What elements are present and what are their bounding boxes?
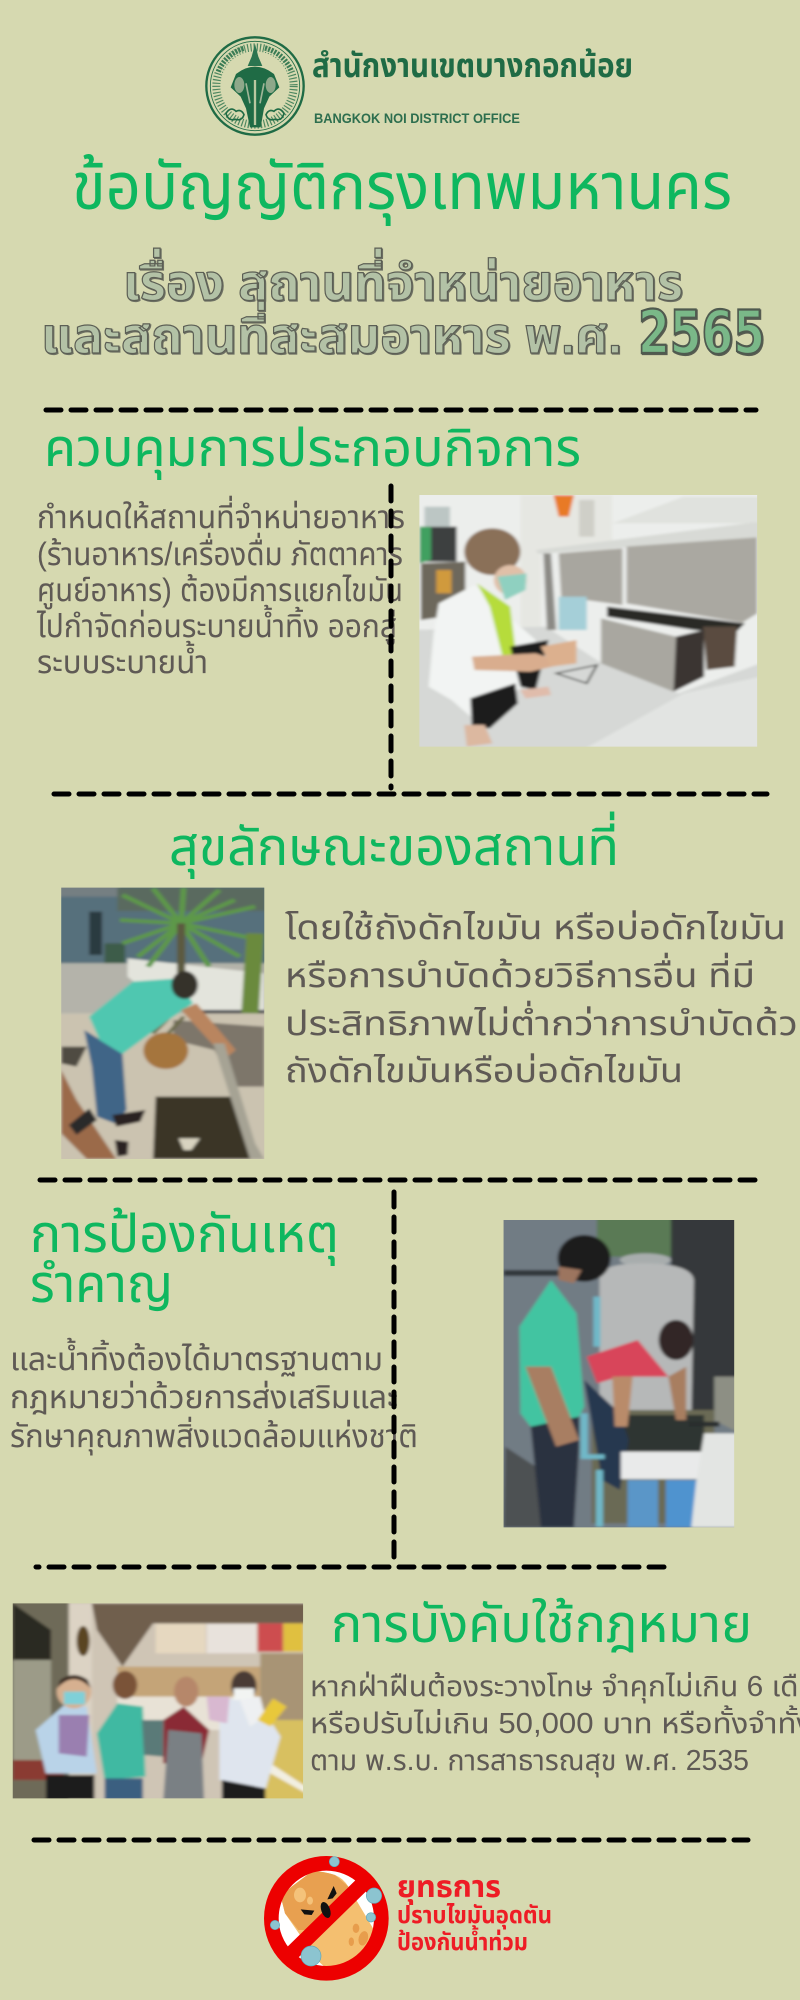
title: ข้อบัญญัติกรุงเทพมหานคร xyxy=(72,150,732,226)
text block: penalties xyxy=(310,1671,800,1777)
heading: law enforcement: การบังคับใช้กฎหมาย xyxy=(331,1595,752,1654)
campaign text: ปราบไขมันอุดตัน xyxy=(397,1902,552,1930)
panel: nuisance prevention xyxy=(10,1192,740,1560)
text block: grease trap requirement: หรือการบำบัดด้วยวิธีการอื่น ที่มี xyxy=(285,952,755,995)
campaign text: ยุทธการ xyxy=(397,1871,501,1905)
panel: premises sanitation xyxy=(51,811,800,1163)
subtitle xyxy=(41,248,765,368)
subtitle line 1: เรื่อง สถานที่จำหน่ายอาหาร xyxy=(123,248,683,311)
office name in Thai: สำนักงานเขตบางกอกน้อย xyxy=(312,47,633,85)
heading: business control: ควบคุมการประกอบกิจการ xyxy=(44,419,581,480)
subtitle line 2: และสถานที่สะสมอาหาร พ.ศ. xyxy=(41,301,622,364)
campaign text: ป้องกันน้ำท่วม xyxy=(397,1925,528,1956)
photo: officers with restaurant staff holding leaflets xyxy=(5,1600,311,1803)
heading: nuisance prevention: รำคาญ xyxy=(30,1255,173,1314)
text block: wastewater standards: รักษาคุณภาพสิ่งแวดล้อมแห่งชาติ xyxy=(10,1416,418,1455)
icon: Bangkok city seal xyxy=(206,37,304,135)
icon: crossed-out grease sponge xyxy=(270,1857,382,1973)
text block: fat separation requirement: (ร้านอาหาร/เครื่องดื่ม ภัตตาคาร xyxy=(37,532,403,572)
text block: penalties: ตาม พ.ร.บ. การสาธารณสุข พ.ศ. 2535 xyxy=(310,1745,749,1777)
text block: grease trap requirement: ประสิทธิภาพไม่ต่ำกว่าการบำบัดด้วย xyxy=(285,1000,800,1043)
text block: wastewater standards: และน้ำทิ้งต้องได้มาตรฐานตาม xyxy=(10,1337,383,1377)
text block: fat separation requirement: ศูนย์อาหาร) ต้องมีการแยกไขมัน xyxy=(37,572,403,610)
text block: grease trap requirement: ถังดักไขมันหรือบ่อดักไขมัน xyxy=(285,1052,683,1090)
header: district office logo and name xyxy=(206,37,633,135)
office name in English: BANGKOK NOI DISTRICT OFFICE xyxy=(314,110,520,126)
heading: premises sanitation: สุขลักษณะของสถานที่ xyxy=(169,811,619,879)
panel: business control xyxy=(36,419,765,788)
photo: inspector at grease trap under sink xyxy=(408,490,765,753)
text block: fat separation requirement: กำหนดให้สถานที่จำหน่ายอาหาร xyxy=(37,495,405,535)
text block: fat separation requirement: ระบบระบายน้ำ xyxy=(37,640,208,680)
footer: campaign badge xyxy=(270,1857,552,1973)
text block: wastewater standards: กฎหมายว่าด้วยการส่งเสริมและ xyxy=(10,1379,398,1415)
text block: grease trap requirement xyxy=(285,909,800,1090)
photo: officer checking grease pit xyxy=(61,888,264,1159)
text block: wastewater standards xyxy=(10,1337,418,1455)
heading: nuisance prevention xyxy=(30,1205,339,1314)
campaign text xyxy=(397,1871,552,1956)
heading: nuisance prevention: การป้องกันเหตุ xyxy=(30,1205,339,1266)
year 2565: 2565 xyxy=(638,298,765,368)
photo: officers inspecting water tank xyxy=(495,1213,740,1533)
panel: law enforcement xyxy=(5,1595,800,1803)
text block: fat separation requirement: ไปกำจัดก่อนระบายน้ำทิ้ง ออกสู่ xyxy=(36,604,397,646)
text block: grease trap requirement: โดยใช้ถังดักไขมัน หรือบ่อดักไขมัน xyxy=(285,909,786,947)
text block: fat separation requirement xyxy=(36,495,405,680)
